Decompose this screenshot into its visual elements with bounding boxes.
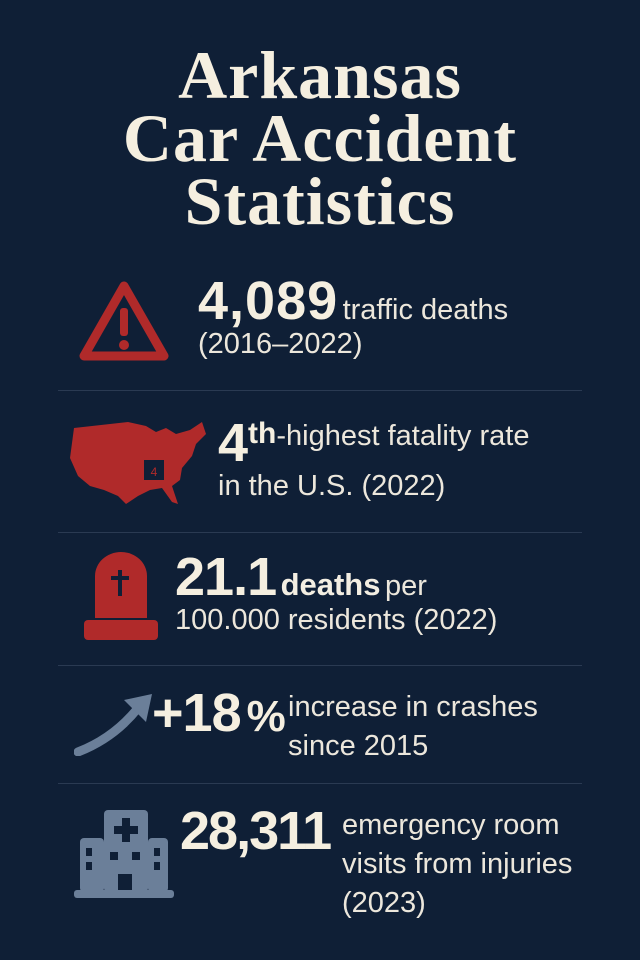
title: Car Accident xyxy=(123,100,517,176)
stat: deaths per 100,000 xyxy=(175,547,497,636)
stat: traffic deaths: 4,089 traffic deaths xyxy=(198,271,508,331)
stat: ER visits xyxy=(180,801,572,919)
stat: deaths per 100,000: 21.1 deaths per xyxy=(175,547,427,607)
stat: deaths per 100,000: 100.000 residents (2022) xyxy=(175,604,497,636)
icon: US map: 4 xyxy=(151,465,158,479)
stat: crash increase: increase in crashes xyxy=(288,691,538,723)
title: Statistics xyxy=(185,163,455,239)
stat: crash increase: +18% xyxy=(152,683,286,743)
stat: crash increase xyxy=(152,683,538,762)
icon: rising arrow xyxy=(74,694,152,756)
stat: traffic deaths: (2016–2022) xyxy=(198,328,362,360)
title: Arkansas xyxy=(178,37,462,113)
stat: fatality rank: in the U.S. (2022) xyxy=(218,470,445,502)
stat: ER visits: visits from injuries xyxy=(342,848,572,880)
stat: fatality rank xyxy=(218,413,529,502)
title xyxy=(123,37,517,239)
stat: ER visits: (2023) xyxy=(342,887,426,919)
stat: ER visits: emergency room xyxy=(342,809,560,841)
stat: traffic deaths xyxy=(198,271,508,360)
stat: fatality rank: 4th-highest fatality rate xyxy=(218,413,529,473)
icon: warning triangle xyxy=(80,282,168,360)
icon: US map xyxy=(70,422,206,504)
icon: hospital xyxy=(74,810,174,898)
icon: tombstone xyxy=(84,552,158,640)
stat: ER visits: 28,311 xyxy=(180,801,330,861)
stat: crash increase: since 2015 xyxy=(288,730,428,762)
